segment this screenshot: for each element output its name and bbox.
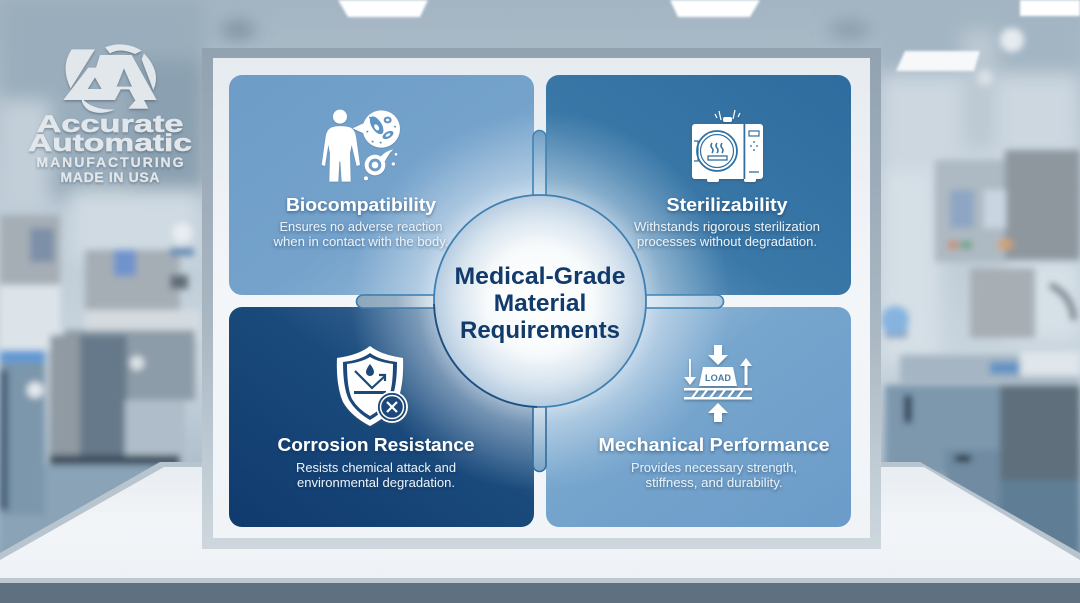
channel: right [642, 295, 724, 308]
icon: person with cell and microscope view [322, 110, 400, 182]
icon: shield with droplet and x badge [337, 346, 407, 426]
description: sterilizability: Withstands rigorous sterilization [634, 219, 820, 234]
description: corrosion resistance [296, 460, 456, 490]
logo wordmark: Accurate [36, 111, 184, 138]
heading: corrosion resistance: Corrosion Resistance [278, 434, 474, 455]
card: corrosion resistance background [229, 307, 534, 527]
logo wordmark: Automatic [28, 130, 192, 157]
central glow [350, 111, 730, 491]
description: mechanical performance [631, 460, 797, 490]
title: Requirements [460, 317, 620, 344]
logo wordmark: MADE IN USA [60, 169, 160, 185]
card: mechanical performance background [546, 307, 851, 527]
center hub: cross channels and circle [357, 130, 724, 472]
card: biocompatibility background [229, 75, 534, 295]
card: sterilizability background [546, 75, 851, 295]
block: mechanical performance [598, 345, 830, 490]
title: Medical-Grade [454, 263, 626, 290]
logo: Accurate Automatic Manufacturing [28, 44, 192, 185]
hub outline lower-left [434, 304, 537, 407]
block: sterilizability [634, 110, 820, 249]
display frame [202, 48, 881, 549]
heading: sterilizability: Sterilizability [666, 194, 788, 215]
channel: top [533, 130, 546, 198]
heading: mechanical performance: Mechanical Performance [598, 434, 830, 455]
hub circle [434, 195, 646, 407]
description: corrosion resistance: environmental degradation. [297, 475, 455, 490]
description: biocompatibility [272, 219, 448, 249]
description: sterilizability [634, 219, 820, 249]
table surface [0, 462, 1080, 603]
channel: left [357, 295, 438, 308]
description: biocompatibility: when in contact with the body. [272, 234, 448, 249]
description: corrosion resistance: Resists chemical attack and [296, 460, 456, 475]
description: biocompatibility: Ensures no adverse reaction [280, 219, 442, 234]
block: biocompatibility [272, 110, 448, 249]
description: sterilizability: processes without degradation. [637, 234, 817, 249]
icon: autoclave [692, 110, 763, 182]
title: Material [494, 290, 586, 317]
logo wordmark: MANUFACTURING [36, 154, 184, 170]
title [454, 263, 626, 344]
icon: load under compression [684, 345, 752, 422]
block: corrosion resistance [278, 346, 474, 490]
logo wordmark [28, 111, 192, 185]
heading: biocompatibility: Biocompatibility [286, 194, 437, 215]
icon: load under compression: LOAD [705, 373, 732, 383]
description: mechanical performance: stiffness, and durability. [646, 475, 782, 490]
channel: bottom [533, 404, 546, 472]
quadrant cards with central glow [229, 75, 851, 527]
description: mechanical performance: Provides necessary strength, [631, 460, 797, 475]
logo mark [63, 44, 157, 113]
